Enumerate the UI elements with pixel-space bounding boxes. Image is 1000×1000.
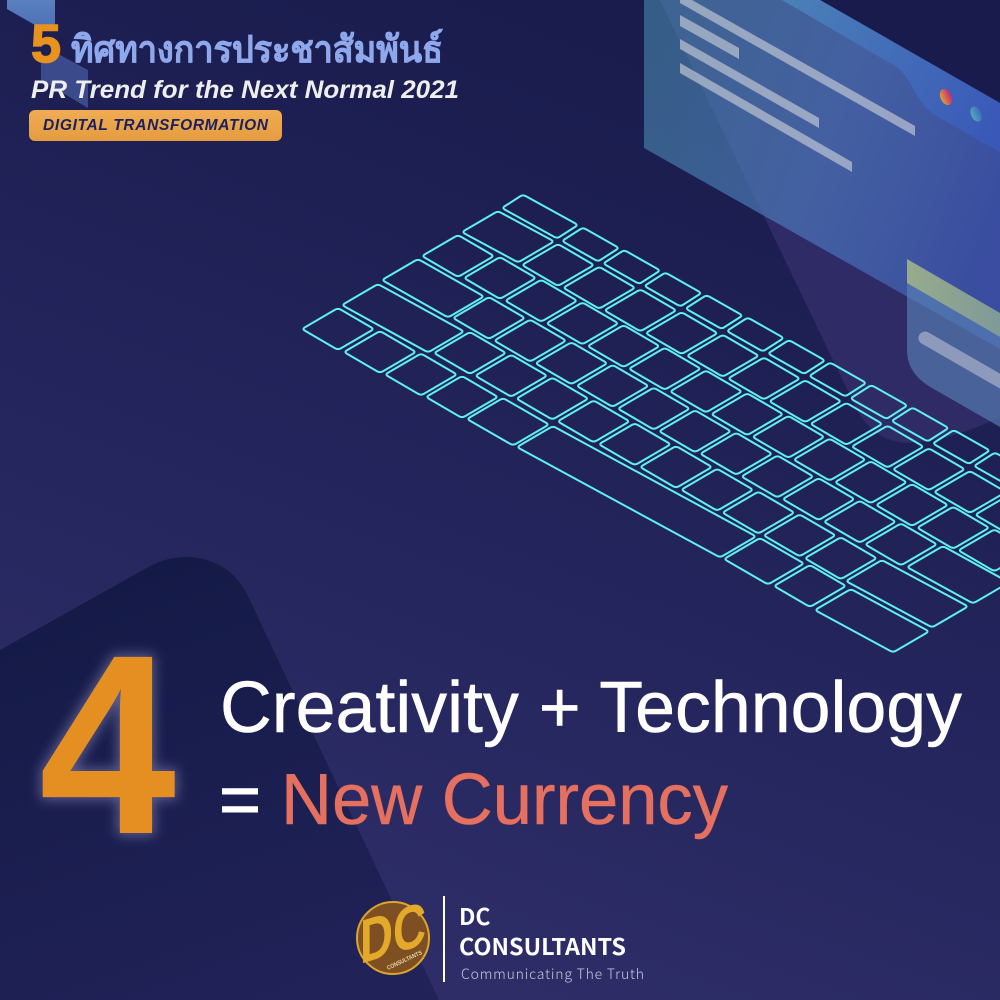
headline line 2: New Currency (281, 760, 728, 840)
big number 4: 4 (39, 602, 176, 888)
key row 5 (503, 195, 1000, 486)
card white bar (925, 338, 1000, 384)
headline line 2: = (219, 760, 261, 840)
card green stripe (907, 259, 1000, 337)
card body (907, 283, 1000, 427)
company name (459, 898, 644, 984)
top-left decorative blue shapes (7, 0, 88, 108)
keyboard outline (304, 195, 1000, 652)
key row 4 (464, 212, 1000, 535)
key row 0 (304, 309, 928, 652)
dark rounded background shape (0, 557, 439, 1000)
key row 1 (344, 285, 966, 627)
orange number 5: 5 (31, 14, 61, 74)
English subtitle: PR Trend for the Next Normal 2021 (31, 76, 459, 104)
badge (29, 110, 282, 141)
logo: DC circle: CONSULTANTS (386, 950, 423, 972)
logo divider (443, 896, 445, 982)
key row 3 (424, 236, 1000, 571)
window text lines (680, 0, 915, 172)
window panel (644, 0, 1000, 349)
company name: CONSULTANTS (459, 928, 626, 962)
browser window illustration (644, 0, 1000, 349)
window red dot (937, 87, 955, 107)
key row 2 (384, 260, 1000, 603)
window blue dot (968, 105, 984, 123)
company name: Communicating The Truth (461, 964, 644, 984)
window title bar (782, 0, 1000, 152)
logo: DC circle: DC (360, 889, 426, 978)
Thai title: ทิศทางการประชาสัมพันธ์ (71, 29, 443, 70)
big number 4: 4 (39, 602, 176, 888)
small card illustration (907, 259, 1000, 427)
company name: DC (459, 898, 491, 932)
logo: DC circle (357, 889, 429, 978)
purple shadow shape behind window (660, 0, 1000, 443)
header (29, 14, 459, 141)
badge: DIGITAL TRANSFORMATION (43, 117, 269, 134)
headline line 1: Creativity + Technology (220, 668, 962, 748)
